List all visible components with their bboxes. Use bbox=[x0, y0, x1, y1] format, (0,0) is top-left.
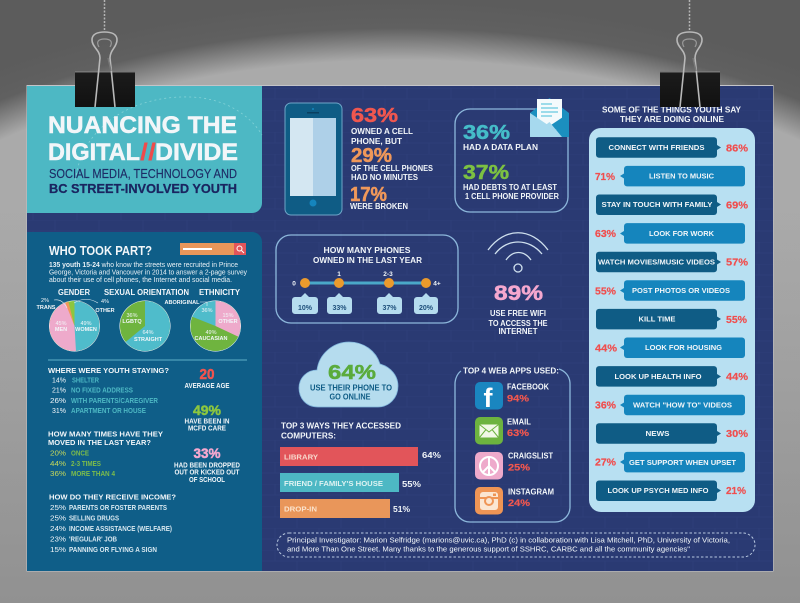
stat: MCFD care: MCFD CARE bbox=[188, 424, 226, 432]
panel: top 4 web apps: TOP 4 WEB APPS USED: bbox=[463, 366, 559, 376]
panel: phones owned timeline: HOW MANY PHONES bbox=[324, 246, 411, 255]
stat: dropped out: OF SCHOOL bbox=[189, 475, 225, 484]
footer credits: Principal Investigator: Marion Selfridge (marions@uvic.ca), PhD (c) in collaboration with Lisa Mitchell, PhD, University of Victoria, bbox=[287, 536, 730, 544]
intro text: 135 youth 15-24 who know the streets were recruited in Prince bbox=[49, 262, 238, 269]
list: where youth were staying: 21% bbox=[52, 386, 66, 394]
pie headings: ETHNICITY bbox=[199, 288, 241, 297]
stat: free wifi: TO ACCESS THE bbox=[488, 319, 548, 328]
panel: data plan: 36% bbox=[463, 122, 510, 144]
list: income: HOW DO THEY RECEIVE INCOME? bbox=[49, 492, 176, 502]
icon: envelope bbox=[530, 98, 569, 137]
pie chart: gender: TRANS bbox=[37, 305, 56, 311]
list: times moved: MORE THAN 4 bbox=[71, 469, 116, 478]
panel: phones owned timeline bbox=[276, 235, 458, 323]
list: where youth were staying: APARTMENT OR HOUSE bbox=[71, 406, 146, 415]
app label: email bbox=[507, 418, 531, 439]
list: income: 15% bbox=[50, 545, 66, 554]
icon: peace sign bbox=[475, 452, 503, 480]
pie chart: ethnicity: 15% bbox=[222, 313, 234, 319]
panel: data plan: HAD A DATA PLAN bbox=[463, 143, 538, 152]
bar: drop-in: 51% bbox=[393, 504, 410, 514]
stats: cell phones: 29% bbox=[351, 145, 392, 167]
subtitle line 1: SOCIAL MEDIA, TECHNOLOGY AND bbox=[49, 167, 237, 181]
list: times moved: 20% bbox=[50, 448, 66, 458]
row: kill time: KILL TIME bbox=[638, 315, 676, 324]
callout: 33%: 33% bbox=[332, 305, 347, 312]
bar: friend / family's house: FRIEND / FAMILY'S HOUSE bbox=[284, 479, 383, 488]
panel: top 4 web apps bbox=[455, 366, 570, 522]
panel: online activities bbox=[589, 128, 755, 512]
pie chart: sexual orientation: 36% bbox=[126, 313, 138, 319]
title line 1: NUANCING THE bbox=[48, 112, 237, 139]
footer credits: and More Than One Street. Many thanks to the generous support of SSHRC, CARBC and all the community agencies" bbox=[287, 544, 690, 554]
list: times moved: 2-3 TIMES bbox=[71, 459, 101, 468]
binder clip: left bbox=[75, 0, 135, 107]
app label: instagram: INSTAGRAM bbox=[508, 488, 554, 496]
pie chart: gender: OTHER bbox=[95, 308, 115, 314]
pie chart: gender: 45% bbox=[55, 321, 67, 327]
row: kill time: 55% bbox=[726, 314, 748, 326]
subtitle line 2: BC STREET-INVOLVED YOUTH bbox=[49, 182, 237, 196]
row: look for work: LOOK FOR WORK bbox=[649, 229, 715, 238]
row: post photos or videos: 55% bbox=[595, 286, 617, 298]
panel: data plan: 37% bbox=[463, 162, 509, 184]
heading: things youth do online: SOME OF THE THINGS YOUTH SAY bbox=[602, 106, 742, 114]
bar: drop-in bbox=[280, 499, 410, 518]
app label: craigslist: CRAIGSLIST bbox=[508, 452, 553, 460]
pie chart: gender: WOMEN bbox=[75, 327, 97, 333]
list: income: 'REGULAR' JOB bbox=[69, 534, 117, 544]
row: get support when upset bbox=[595, 452, 745, 472]
row: post photos or videos: POST PHOTOS OR VIDEOS bbox=[632, 286, 730, 295]
list: income: 24% bbox=[50, 524, 66, 533]
app label: craigslist: 25% bbox=[508, 462, 531, 474]
row: watch movies/music videos bbox=[596, 252, 749, 272]
stat: free wifi bbox=[488, 282, 548, 336]
icon: wifi bbox=[488, 233, 548, 272]
list: where youth were staying: WHERE WERE YOUTH STAYING? bbox=[48, 366, 169, 375]
row: look up psych med info: 21% bbox=[726, 485, 747, 497]
callout: 20%: 20% bbox=[419, 305, 434, 312]
stat: average age: 20 bbox=[200, 366, 214, 383]
app label: instagram bbox=[508, 488, 554, 509]
intro text: George, Victoria and Vancouver in 2014 to answer a 2-page survey bbox=[49, 270, 247, 276]
row: listen to music: LISTEN TO MUSIC bbox=[649, 172, 715, 181]
stat: MCFD care bbox=[184, 402, 230, 432]
row: connect with friends bbox=[596, 137, 749, 158]
stat: free wifi: USE FREE WIFI bbox=[490, 309, 546, 318]
callout: 33% bbox=[327, 293, 352, 314]
panel: title bbox=[27, 86, 262, 213]
app label: craigslist bbox=[508, 452, 553, 474]
cloud callout: USE THEIR PHONE TO bbox=[310, 384, 392, 392]
panel: who took part bbox=[27, 232, 262, 571]
callout: 20% bbox=[414, 293, 438, 314]
pie chart: sexual orientation: LGBTQ bbox=[122, 319, 142, 325]
intro text: about their use of cell phones, the Internet and social media. bbox=[49, 277, 232, 284]
intro text bbox=[49, 262, 247, 284]
row: kill time bbox=[596, 309, 748, 329]
row: look up psych med info bbox=[596, 480, 747, 501]
pie chart: ethnicity: CAUCASIAN bbox=[194, 336, 228, 342]
stats: cell phones: OF THE CELL PHONES bbox=[351, 164, 434, 173]
list: times moved bbox=[48, 430, 163, 478]
list: where youth were staying: 26% bbox=[50, 396, 66, 405]
list: income: 25% bbox=[50, 503, 66, 512]
cloud callout bbox=[299, 342, 398, 407]
callout: 37% bbox=[377, 293, 402, 314]
row: connect with friends: 86% bbox=[726, 142, 749, 154]
cloud callout: GO ONLINE bbox=[330, 392, 370, 402]
app label: facebook bbox=[507, 382, 549, 404]
row: get support when upset: GET SUPPORT WHEN UPSET bbox=[629, 458, 736, 467]
timeline: 1 bbox=[337, 271, 341, 278]
panel: data plan: HAD DEBTS TO AT LEAST bbox=[463, 183, 557, 192]
icon: instagram bbox=[475, 487, 503, 514]
row: look for housing: 44% bbox=[595, 342, 618, 354]
row: news bbox=[596, 423, 749, 444]
row: stay in touch with family bbox=[596, 194, 749, 215]
list: where youth were staying: 14% bbox=[52, 376, 66, 384]
row: look up health info: 44% bbox=[726, 371, 749, 383]
list: where youth were staying: NO FIXED ADDRESS bbox=[71, 386, 133, 394]
list: where youth were staying bbox=[48, 366, 169, 415]
bar: library: 64% bbox=[422, 450, 441, 460]
row: stay in touch with family: STAY IN TOUCH WITH FAMILY bbox=[602, 200, 713, 209]
pie chart: gender: 4% bbox=[101, 299, 109, 305]
panel: phones owned timeline: OWNED IN THE LAST YEAR bbox=[313, 256, 422, 265]
poster bbox=[26, 85, 774, 572]
row: watch how to videos: 36% bbox=[595, 400, 617, 412]
bar: library: LIBRARY bbox=[284, 452, 318, 462]
bar chart: computer access: TOP 3 WAYS THEY ACCESSED bbox=[281, 422, 401, 430]
list: times moved: HOW MANY TIMES HAVE THEY bbox=[48, 430, 163, 438]
app label: email: 63% bbox=[507, 428, 530, 439]
stats: cell phones: WERE BROKEN bbox=[350, 202, 408, 211]
stats: cell phones: OWNED A CELL bbox=[351, 127, 413, 136]
icon: email bbox=[475, 417, 503, 444]
list: times moved: 36% bbox=[50, 469, 66, 478]
row: watch movies/music videos: WATCH MOVIES/MUSIC VIDEOS bbox=[598, 257, 715, 266]
pie chart: gender bbox=[37, 298, 115, 352]
stat: MCFD care: 49% bbox=[193, 402, 222, 418]
callout: 10% bbox=[292, 293, 318, 314]
callout: 37%: 37% bbox=[382, 305, 397, 312]
row: look up health info bbox=[596, 366, 749, 387]
pie headings bbox=[58, 288, 241, 297]
list: income: SELLING DRUGS bbox=[69, 514, 119, 522]
row: stay in touch with family: 69% bbox=[726, 200, 749, 212]
row: listen to music bbox=[595, 166, 745, 186]
heading: who took part: WHO TOOK PART? bbox=[49, 243, 152, 258]
pie chart: ethnicity: ABORIGINAL bbox=[164, 300, 200, 306]
list: income: 23% bbox=[50, 534, 66, 544]
row: listen to music: 71% bbox=[595, 171, 616, 183]
panel: data plan bbox=[455, 109, 568, 212]
timeline: 2-3 bbox=[383, 271, 393, 278]
pie chart: sexual orientation: 64% bbox=[142, 330, 154, 336]
stats: cell phones: 17% bbox=[350, 184, 387, 206]
icon: search bar bbox=[180, 243, 246, 255]
stat: MCFD care: HAVE BEEN IN bbox=[184, 416, 230, 426]
stat: dropped out: HAD BEEN DROPPED bbox=[174, 460, 240, 470]
row: connect with friends: CONNECT WITH FRIENDS bbox=[608, 143, 705, 152]
list: income: 25% bbox=[50, 514, 66, 522]
pie chart: gender: MEN bbox=[55, 327, 67, 333]
icon: facebook: f bbox=[484, 383, 494, 413]
cloud callout: 64% bbox=[328, 362, 376, 384]
row: look for housing: LOOK FOR HOUSING bbox=[645, 343, 722, 352]
title line 2 end: DIVIDE bbox=[155, 139, 238, 166]
app label: facebook: FACEBOOK bbox=[507, 382, 549, 392]
pie chart: gender: 2% bbox=[41, 298, 49, 304]
row: news: 30% bbox=[726, 428, 749, 440]
row: look up health info: LOOK UP HEALTH INFO bbox=[614, 372, 702, 381]
list: where youth were staying: SHELTER bbox=[72, 376, 99, 384]
list: income: INCOME ASSISTANCE (WELFARE) bbox=[69, 524, 172, 533]
heading: things youth do online: THEY ARE DOING ONLINE bbox=[620, 115, 725, 124]
title line 2: DIGITAL bbox=[48, 139, 140, 166]
app label: facebook: 94% bbox=[507, 394, 530, 404]
bar: library bbox=[280, 447, 441, 466]
bar chart: computer access: COMPUTERS: bbox=[281, 432, 336, 440]
list: times moved: MOVED IN THE LAST YEAR? bbox=[48, 438, 151, 447]
pie chart: sexual orientation: STRAIGHT bbox=[134, 337, 163, 343]
app label: email: EMAIL bbox=[507, 418, 531, 426]
stat: dropped out: 33% bbox=[194, 445, 221, 461]
row: post photos or videos bbox=[595, 280, 745, 301]
stat: average age: AVERAGE AGE bbox=[184, 381, 230, 390]
list: where youth were staying: WITH PARENTS/CAREGIVER bbox=[71, 396, 158, 405]
row: news: NEWS bbox=[646, 429, 670, 438]
row: watch how to videos bbox=[595, 395, 745, 415]
list: where youth were staying: 31% bbox=[52, 406, 66, 415]
binder clip: right bbox=[660, 0, 720, 107]
heading: things youth do online bbox=[602, 106, 742, 124]
bar: drop-in: DROP-IN bbox=[284, 504, 317, 514]
bar: friend / family's house: 55% bbox=[402, 479, 421, 489]
list: income: PARENTS OR FOSTER PARENTS bbox=[69, 503, 167, 512]
bar: friend / family's house bbox=[280, 473, 421, 492]
bar chart: computer access bbox=[280, 422, 441, 518]
list: times moved: ONCE bbox=[71, 448, 89, 458]
row: look for work bbox=[595, 223, 745, 244]
stat: free wifi: 89% bbox=[494, 282, 543, 305]
panel: data plan: 1 CELL PHONE PROVIDER bbox=[465, 192, 559, 201]
icon: phone bbox=[285, 103, 342, 215]
timeline bbox=[292, 271, 441, 288]
app label: instagram: 24% bbox=[508, 498, 531, 509]
stats: cell phones: 63% bbox=[351, 105, 398, 127]
pie headings: SEXUAL ORIENTATION bbox=[104, 288, 189, 297]
row: get support when upset: 27% bbox=[595, 456, 617, 468]
timeline: 0 bbox=[292, 280, 296, 288]
list: income bbox=[49, 492, 176, 554]
icon: facebook bbox=[475, 382, 503, 413]
list: income: PANNING OR FLYING A SIGN bbox=[69, 545, 157, 554]
stats: cell phones: PHONE, BUT bbox=[351, 137, 402, 146]
row: watch movies/music videos: 57% bbox=[726, 256, 749, 268]
pie chart: ethnicity: 36% bbox=[201, 308, 213, 314]
row: look for housing bbox=[595, 338, 745, 358]
pie headings: GENDER bbox=[58, 288, 90, 297]
title slashes: // bbox=[140, 139, 156, 166]
stat: free wifi: INTERNET bbox=[498, 327, 538, 336]
row: look up psych med info: LOOK UP PSYCH MED INFO bbox=[608, 486, 709, 495]
pie chart: sexual orientation bbox=[120, 300, 170, 352]
pie chart: ethnicity bbox=[164, 300, 241, 352]
stat: average age bbox=[184, 366, 230, 390]
row: look for work: 63% bbox=[595, 228, 617, 240]
stat: dropped out bbox=[174, 445, 240, 484]
pie chart: gender: 49% bbox=[80, 321, 92, 327]
pie chart: ethnicity: OTHER bbox=[218, 319, 238, 325]
stat: dropped out: OUT OR KICKED OUT bbox=[174, 468, 240, 476]
callout: 10%: 10% bbox=[298, 305, 313, 312]
timeline: 4+ bbox=[433, 280, 441, 288]
row: watch how to videos: WATCH "HOW TO" VIDEOS bbox=[633, 400, 732, 410]
pie chart: ethnicity: 49% bbox=[205, 330, 217, 336]
list: times moved: 44% bbox=[50, 459, 66, 468]
stats: cell phones: HAD NO MINUTES bbox=[351, 173, 419, 182]
stats: cell phones bbox=[350, 105, 434, 211]
footer credits bbox=[277, 533, 755, 557]
